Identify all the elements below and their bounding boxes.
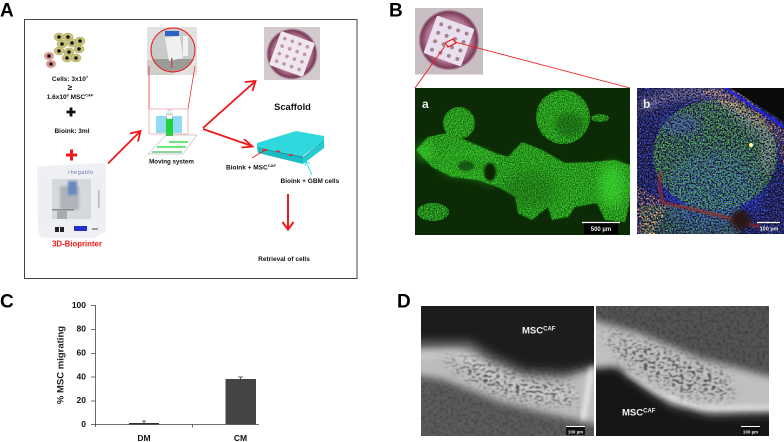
micrograph b: multicolour immunofluorescence bbox=[637, 88, 784, 234]
icon: 3D bioprinter bbox=[37, 163, 106, 238]
scale bar 100 micrometres bbox=[757, 222, 780, 232]
text: bioink plus MSC label: CAF bbox=[268, 163, 276, 168]
axes bbox=[91, 305, 259, 428]
micrograph: left migration field bbox=[421, 306, 594, 436]
text: 3D-Bioprinter label: 3D-Bioprinter bbox=[52, 240, 102, 248]
x axis labels bbox=[137, 433, 247, 442]
panel letter A: A bbox=[0, 0, 14, 22]
text: retrieval of cells: Retrieval of cells bbox=[258, 256, 310, 263]
y axis tick labels: 60 bbox=[77, 348, 86, 358]
y axis tick labels: 0 bbox=[81, 419, 86, 429]
label: MSC CAF left: MSC bbox=[522, 326, 543, 336]
zoom lines and inset marker bbox=[415, 39, 630, 88]
y axis tick labels: 40 bbox=[77, 372, 86, 382]
label a: a bbox=[422, 97, 429, 111]
label: MSC CAF right: MSC bbox=[622, 408, 643, 418]
icon: black plus bbox=[66, 108, 76, 116]
icon: cell cluster bbox=[44, 33, 85, 68]
label: MSC CAF right: CAF bbox=[643, 408, 656, 414]
micrograph: right migration field bbox=[596, 306, 769, 436]
panel letter B: B bbox=[389, 0, 403, 22]
scale bar 500 micrometres bbox=[582, 222, 620, 234]
micrograph a: green cell mass bbox=[415, 88, 630, 235]
photo: scaffold in dish bbox=[415, 8, 483, 74]
arrow: pointer to MSC bioink bbox=[252, 150, 265, 158]
y axis tick labels bbox=[72, 300, 86, 429]
arrow: retrieval down arrow bbox=[282, 194, 294, 230]
text: cell counts: MSC bbox=[69, 94, 85, 101]
text: cell counts: 7 bbox=[86, 74, 89, 80]
y axis title: % MSC migrating bbox=[56, 326, 66, 404]
label: MSC CAF left: CAF bbox=[543, 326, 556, 332]
panel B: confocal imaging bbox=[415, 8, 784, 235]
icon: red plus bbox=[66, 150, 77, 160]
text: cell counts: Cells: 3x10 bbox=[52, 76, 86, 83]
scale bar right bbox=[741, 426, 760, 435]
y axis tick labels: 20 bbox=[77, 395, 86, 405]
text: cell counts: 6 bbox=[67, 92, 70, 98]
text: bioink plus GBM label: Bioink + GBM cells bbox=[280, 178, 340, 185]
y axis tick labels: 80 bbox=[77, 324, 86, 334]
arrow: to scaffold dish bbox=[203, 81, 256, 128]
text: bioink plus MSC label: Bioink + MSC bbox=[226, 164, 268, 172]
panel A: bioprinting workflow bbox=[24, 20, 357, 278]
panel letter C: C bbox=[0, 292, 14, 312]
text: bioink volume: Bioink: 3ml bbox=[54, 128, 90, 135]
scale bar right: 100 µm bbox=[743, 430, 758, 434]
icon: 3D bioprinter: rhegablo bbox=[68, 170, 94, 176]
arrow: to layered scaffold bbox=[203, 129, 252, 148]
icon: layered scaffold block bbox=[257, 131, 324, 164]
panel C: bar chart of MSC migration bbox=[56, 300, 259, 442]
text: cell counts: CAF bbox=[85, 92, 94, 98]
text: cell counts: ≥ bbox=[68, 83, 73, 92]
icon: printhead close-up with lens bbox=[147, 27, 197, 75]
text: moving system label: Moving system bbox=[149, 158, 194, 166]
arrow: pointer to GBM bioink bbox=[305, 162, 312, 175]
scale bar 100 micrometres: 100 µm bbox=[760, 226, 778, 232]
text: cell counts bbox=[47, 74, 94, 101]
panel letter D: D bbox=[397, 292, 411, 312]
arrow: bioprinter to moving system bbox=[108, 131, 140, 164]
scale bar left: 100 µm bbox=[568, 430, 583, 434]
icon: scaffold dish photo bbox=[264, 27, 320, 80]
bar: CM bbox=[226, 377, 256, 424]
y axis tick labels: 100 bbox=[72, 300, 86, 310]
icon: moving system syringe diagram bbox=[148, 66, 197, 154]
scale bar 500 micrometres: 500 µm bbox=[591, 227, 611, 233]
text: scaffold heading: Scaffold bbox=[274, 102, 311, 112]
panel D: phase-contrast images bbox=[421, 306, 769, 436]
label b: b bbox=[643, 97, 650, 111]
text: cell counts: 1.6x10 bbox=[47, 94, 67, 101]
scale bar left bbox=[566, 426, 585, 435]
bar: DM bbox=[129, 421, 159, 424]
